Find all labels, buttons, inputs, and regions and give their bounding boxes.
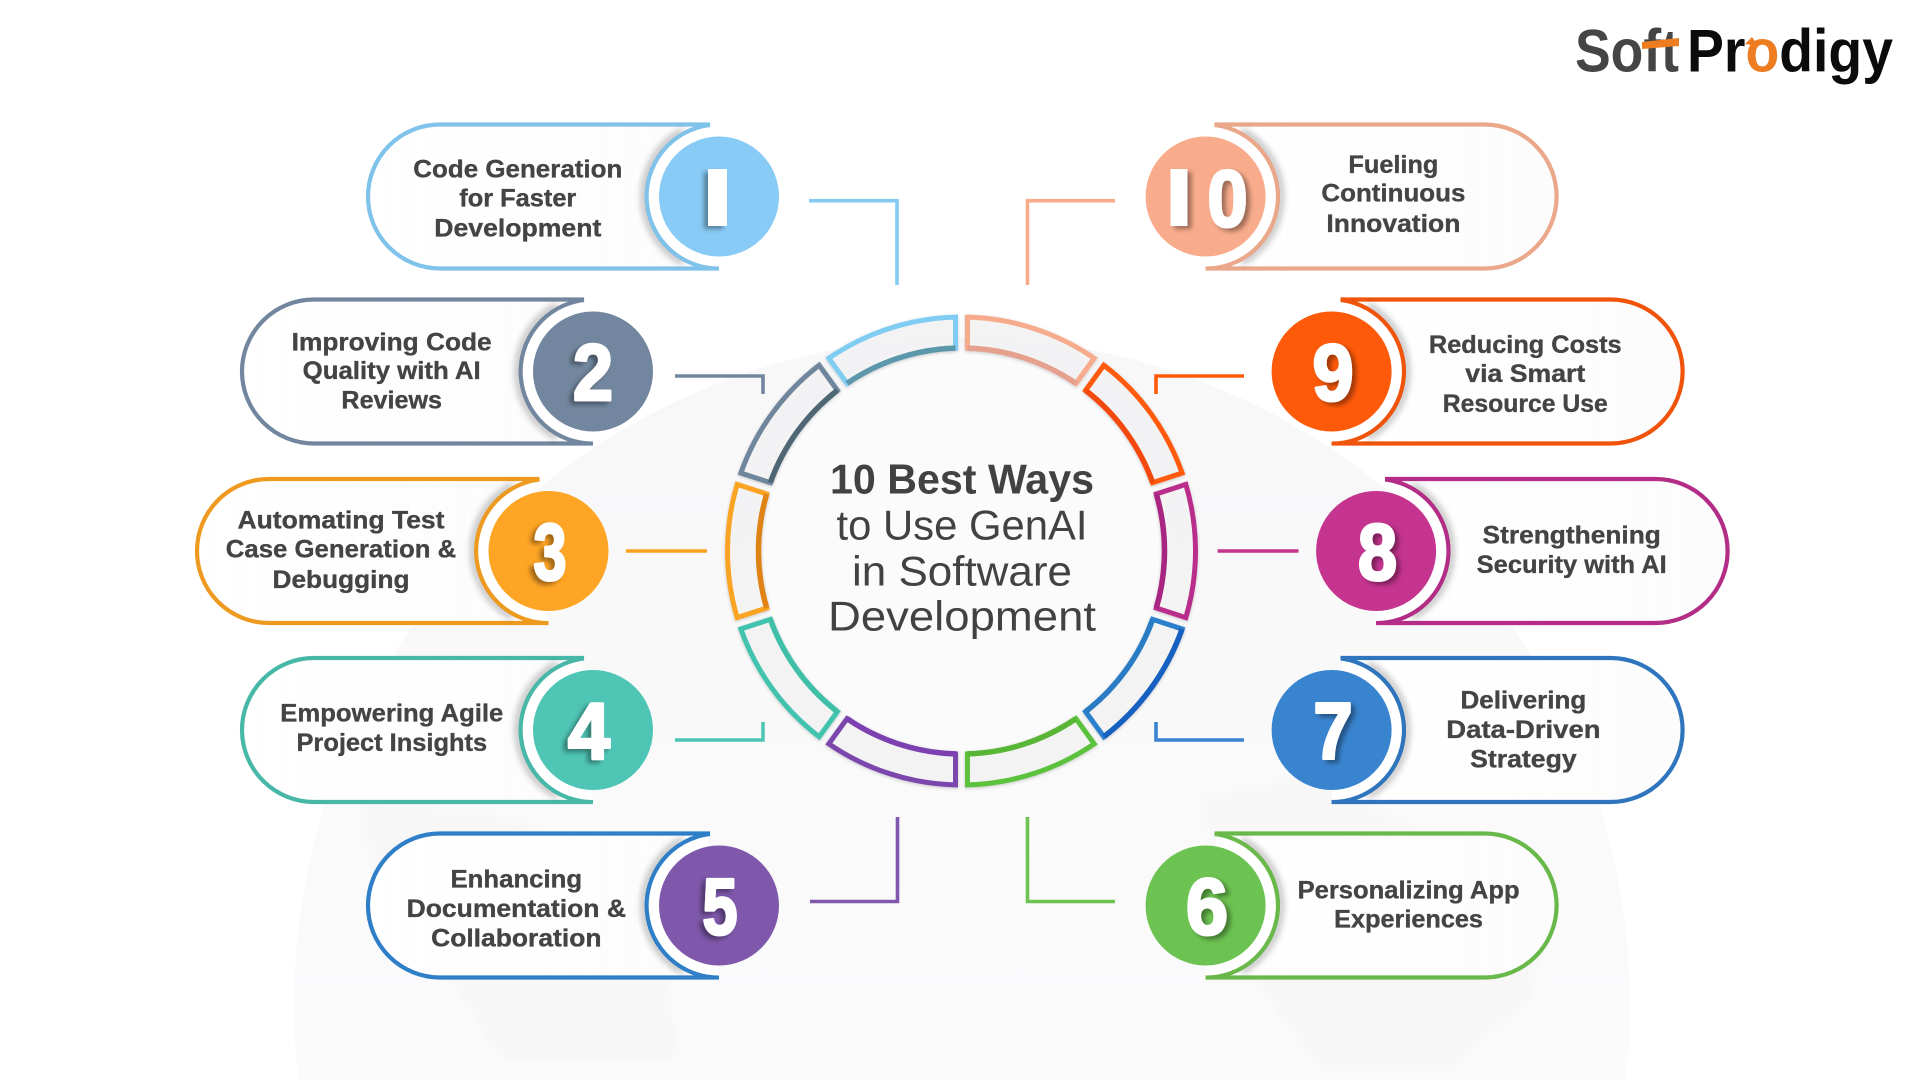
number badge 4 — [533, 670, 653, 790]
label 3: Case Generation & — [226, 536, 456, 564]
label 2 — [292, 328, 492, 414]
logo: SoftProdigy: Prodigy — [1687, 18, 1894, 84]
connector 1 — [809, 201, 897, 285]
title — [828, 456, 1096, 640]
label 2: Quality with AI — [303, 357, 481, 385]
label 5: Collaboration — [431, 924, 602, 952]
label 8: Security with AI — [1477, 551, 1667, 579]
connector 2 — [675, 376, 763, 394]
panel: item 7 — [1272, 658, 1683, 802]
ring segment 7 — [1080, 609, 1182, 749]
label 7 — [1446, 686, 1601, 774]
number badge 9: 9 — [1312, 328, 1354, 417]
panel: item 2 — [242, 300, 653, 444]
label 5: Enhancing — [450, 866, 582, 894]
label 5 — [407, 866, 626, 952]
label 1 — [413, 156, 622, 242]
label 1: for Faster — [459, 185, 577, 213]
label 4 — [280, 700, 503, 757]
panel: item 8 — [1316, 479, 1728, 623]
label 3 — [226, 506, 456, 594]
number badge 3 — [488, 491, 608, 611]
title: 10 Best Ways — [830, 456, 1094, 502]
label 2: Improving Code — [292, 328, 492, 356]
central segmented ring — [698, 284, 1225, 818]
number badge 6 — [1146, 846, 1266, 966]
connector 7 — [1156, 722, 1244, 740]
ring segment 10 — [967, 317, 1094, 383]
label 9: Reducing Costs — [1429, 331, 1622, 359]
number badge 10 — [1146, 136, 1266, 256]
number badge 8 — [1316, 491, 1436, 611]
logo: SoftProdigy — [1575, 18, 1894, 84]
label 8 — [1477, 522, 1667, 579]
number badge 8: 8 — [1358, 508, 1397, 596]
label 10: Innovation — [1326, 210, 1460, 238]
ring segment 9 — [1065, 365, 1206, 493]
background globe — [294, 337, 1630, 1080]
ring segment 3 — [698, 477, 800, 618]
label 3: Automating Test — [238, 506, 445, 534]
number badge 7: 7 — [1314, 686, 1352, 776]
ring segment 4 — [717, 609, 858, 737]
label 10: Continuous — [1321, 180, 1465, 208]
connector 10 — [1028, 201, 1115, 285]
label 2: Reviews — [341, 386, 442, 414]
connector 8 — [1218, 549, 1299, 553]
number badge 1 — [659, 136, 779, 256]
connector 3 — [626, 549, 707, 553]
number badge 4: 4 — [568, 686, 610, 776]
label 7: Data-Driven — [1446, 716, 1601, 744]
number badge 6: 6 — [1186, 862, 1228, 951]
label 9: Resource Use — [1443, 390, 1608, 418]
label 1: Code Generation — [413, 156, 622, 184]
ring segment 1 — [829, 284, 970, 412]
panel: item 9 — [1272, 300, 1683, 444]
label 5: Documentation & — [407, 895, 626, 923]
connector 4 — [675, 722, 763, 740]
connector 6 — [1028, 817, 1115, 902]
ring segment 5 — [829, 719, 956, 785]
title: Development — [828, 592, 1096, 640]
title: in Software — [852, 548, 1072, 594]
panel: item 1 — [368, 124, 779, 269]
number badge 2 — [533, 312, 653, 432]
number badge 5 — [659, 846, 779, 966]
number badge 3: 3 — [534, 508, 566, 596]
label 6: Experiences — [1334, 906, 1483, 934]
panel: item 3 — [197, 479, 608, 623]
label 6 — [1298, 877, 1520, 934]
connector 5 — [810, 817, 898, 902]
label 9: via Smart — [1465, 360, 1586, 388]
ring segment 6 — [953, 690, 1094, 818]
label 6: Personalizing App — [1298, 877, 1520, 905]
label 10: Fueling — [1348, 151, 1438, 179]
number badge 7 — [1272, 670, 1392, 790]
label 3: Debugging — [272, 566, 410, 594]
title: to Use GenAI — [836, 502, 1088, 548]
label 4: Empowering Agile — [280, 700, 503, 728]
label 7: Strategy — [1470, 746, 1577, 774]
label 9 — [1429, 331, 1622, 418]
number badge 2: 2 — [573, 328, 613, 417]
connector 9 — [1156, 376, 1244, 394]
label 10 — [1321, 151, 1465, 238]
number badge 10: 0 — [1208, 154, 1248, 243]
number badge 1: 1 — [702, 154, 732, 243]
logo: SoftProdigy: Soft — [1575, 18, 1679, 84]
label 4: Project Insights — [296, 729, 487, 757]
number badge 5: 5 — [702, 862, 738, 951]
ring segment 8 — [1123, 484, 1225, 625]
number badge 9 — [1272, 312, 1392, 432]
label 8: Strengthening — [1483, 522, 1661, 550]
panel: item 6 — [1146, 834, 1557, 978]
infographic canvas — [194, 28, 1893, 980]
ring segment 2 — [741, 353, 843, 493]
label 7: Delivering — [1460, 686, 1586, 714]
panel: item 4 — [242, 658, 653, 802]
label 1: Development — [434, 214, 602, 242]
panel: item 5 — [368, 834, 779, 978]
number badge 10: 1 — [1165, 154, 1193, 243]
panel: item 10 — [1146, 124, 1557, 269]
